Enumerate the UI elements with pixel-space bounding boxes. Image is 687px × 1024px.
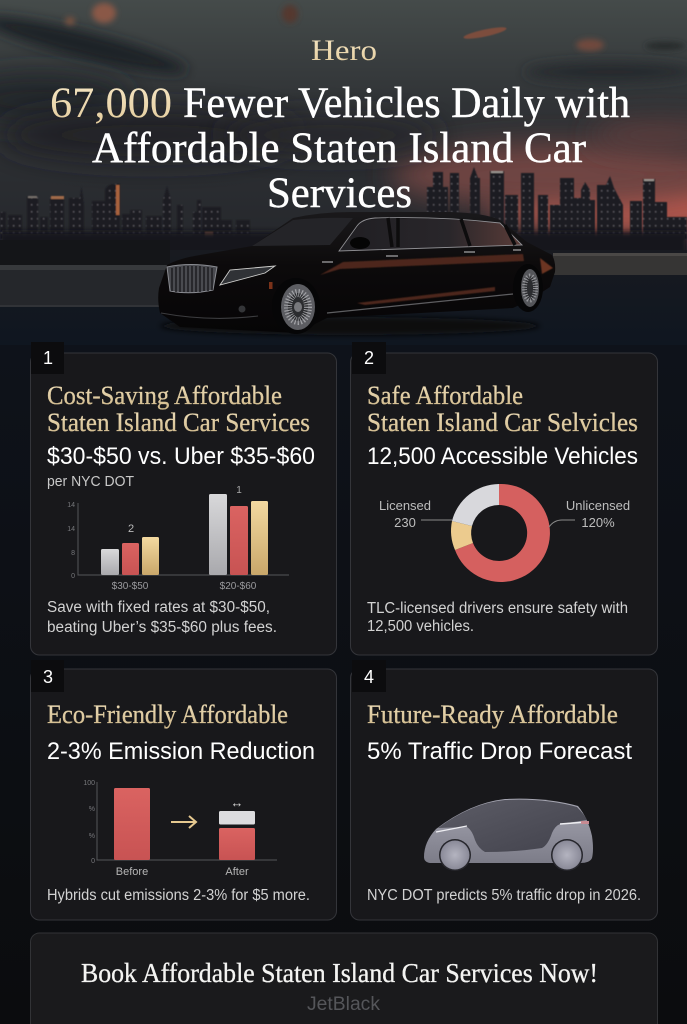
window chrome trim xyxy=(339,218,522,251)
badge 3 xyxy=(31,660,64,692)
panel 1 body text: Save with fixed rates at $30-$50, xyxy=(47,599,270,616)
badge 1: 1 xyxy=(43,348,53,368)
fog lamp xyxy=(238,306,246,312)
low fare bars xyxy=(101,523,159,592)
panel 2 heading: Staten Island Car Selvicles xyxy=(367,408,638,437)
panel 3: emissions xyxy=(30,660,336,920)
panel 2 heading: Safe Affordable xyxy=(367,381,523,410)
amber marker xyxy=(269,282,272,289)
city skyline xyxy=(0,167,687,240)
bar labels xyxy=(116,866,249,878)
bar labels: After xyxy=(225,866,249,878)
y axis labels: 8 xyxy=(71,550,75,557)
panel 2 heading xyxy=(367,381,638,437)
side mirror xyxy=(350,237,370,249)
icon: futuristic electric car xyxy=(424,799,593,871)
hero photo: dusk skyline with limousine xyxy=(0,0,687,345)
badge 3: 3 xyxy=(43,667,53,687)
call to action panel xyxy=(30,933,658,1024)
y axis labels xyxy=(83,780,95,865)
unlicensed label xyxy=(549,498,630,530)
car glass xyxy=(438,800,587,852)
badge 2: 2 xyxy=(364,348,374,368)
hero kicker: Hero xyxy=(311,34,377,67)
grille xyxy=(167,264,217,293)
front light xyxy=(436,826,467,832)
high fare bars: $20-$60 xyxy=(220,581,257,592)
panel 3 body text: Hybrids cut emissions 2-3% for $5 more. xyxy=(47,887,310,904)
donut chart: licensed vs unlicensed xyxy=(379,484,630,582)
panel 1 heading xyxy=(47,381,310,437)
unlicensed label: 120% xyxy=(581,515,615,530)
before and after bar chart xyxy=(83,780,277,878)
gray segment xyxy=(452,484,499,526)
rear wheel xyxy=(513,264,543,312)
high fare bars xyxy=(209,485,268,592)
panel 4 heading: Future-Ready Affordable xyxy=(367,700,618,729)
badge 4: 4 xyxy=(364,667,374,687)
panel 4 statistic: 5% Traffic Drop Forecast xyxy=(367,738,632,765)
panel 1 heading: Cost-Saving Affordable xyxy=(47,381,282,410)
car shell xyxy=(424,799,593,863)
gold segment xyxy=(451,521,473,550)
panel 1: cost saving xyxy=(30,342,336,655)
road and barrier walls xyxy=(0,232,687,345)
front wheel xyxy=(272,278,320,334)
panel 4: future forecast xyxy=(350,660,658,920)
licensed label xyxy=(379,498,452,530)
panel 1 statistic: $30-$50 vs. Uber $35-$60 xyxy=(47,443,315,470)
hero title: Fewer Vehicles Daily with xyxy=(183,80,630,127)
high fare bars: 1 xyxy=(236,485,242,496)
before bar xyxy=(114,788,150,860)
y axis labels: % xyxy=(89,833,95,840)
y axis labels xyxy=(67,502,75,580)
hero title: Services xyxy=(267,170,412,217)
badge 4 xyxy=(352,660,386,692)
chrome sill xyxy=(327,294,513,313)
call to action heading: Book Affordable Staten Island Car Services Now! xyxy=(81,958,598,988)
panel 4 body text: NYC DOT predicts 5% traffic drop in 2026. xyxy=(367,887,641,904)
windshield xyxy=(252,218,353,246)
hero title: Affordable Staten Island Car xyxy=(92,125,586,172)
low fare bars: 2 xyxy=(128,523,134,535)
bar labels: Before xyxy=(116,866,148,878)
brand name: JetBlack xyxy=(307,994,381,1015)
red segment xyxy=(455,484,550,582)
window pillars xyxy=(388,218,515,247)
storm clouds xyxy=(0,3,687,161)
y axis labels: 14 xyxy=(67,502,75,509)
y axis labels: 14 xyxy=(67,526,75,533)
panel 2 body text: 12,500 vehicles. xyxy=(367,618,474,635)
panel 2: safety xyxy=(350,342,658,655)
y axis labels: 0 xyxy=(91,858,95,865)
panel 2 body text xyxy=(367,600,628,635)
y axis labels: 100 xyxy=(83,780,95,787)
rear light xyxy=(560,822,587,824)
side windows xyxy=(339,219,522,251)
door handles xyxy=(322,250,521,262)
badge 1 xyxy=(31,342,64,374)
licensed label: Licensed xyxy=(379,498,431,513)
y axis labels: 0 xyxy=(71,573,75,580)
reduction arrow xyxy=(171,816,196,828)
highlighted number: 67,000 xyxy=(50,80,172,127)
headlight xyxy=(220,266,275,285)
panel 3 heading: Eco-Friendly Affordable xyxy=(47,700,288,729)
unlicensed label: Unlicensed xyxy=(566,498,630,513)
panel 1 body text: beating Uber’s $35-$60 plus fees. xyxy=(47,619,277,636)
panel 1 heading: Staten Island Car Services xyxy=(47,408,310,437)
limousine body xyxy=(158,212,555,333)
panel 1 body text xyxy=(47,599,277,636)
y axis labels: % xyxy=(89,806,95,813)
panel 2 statistic: 12,500 Accessible Vehicles xyxy=(367,443,638,470)
panel 1 source: per NYC DOT xyxy=(47,474,134,490)
after bar xyxy=(219,811,255,860)
licensed label: 230 xyxy=(394,515,416,530)
hero title xyxy=(50,80,630,217)
red body reflections xyxy=(320,254,524,305)
sunset glow xyxy=(390,121,687,235)
panel 2 body text: TLC-licensed drivers ensure safety with xyxy=(367,600,628,617)
double arrow: ↔ xyxy=(230,795,244,810)
bar chart: fares xyxy=(67,485,289,592)
panel 3 statistic: 2-3% Emission Reduction xyxy=(47,738,315,765)
badge 2 xyxy=(352,342,386,374)
bumper line xyxy=(161,313,258,318)
low fare bars: $30-$50 xyxy=(112,581,149,592)
front wheel xyxy=(439,839,471,871)
rear wheel xyxy=(551,839,583,871)
limousine xyxy=(158,212,555,335)
